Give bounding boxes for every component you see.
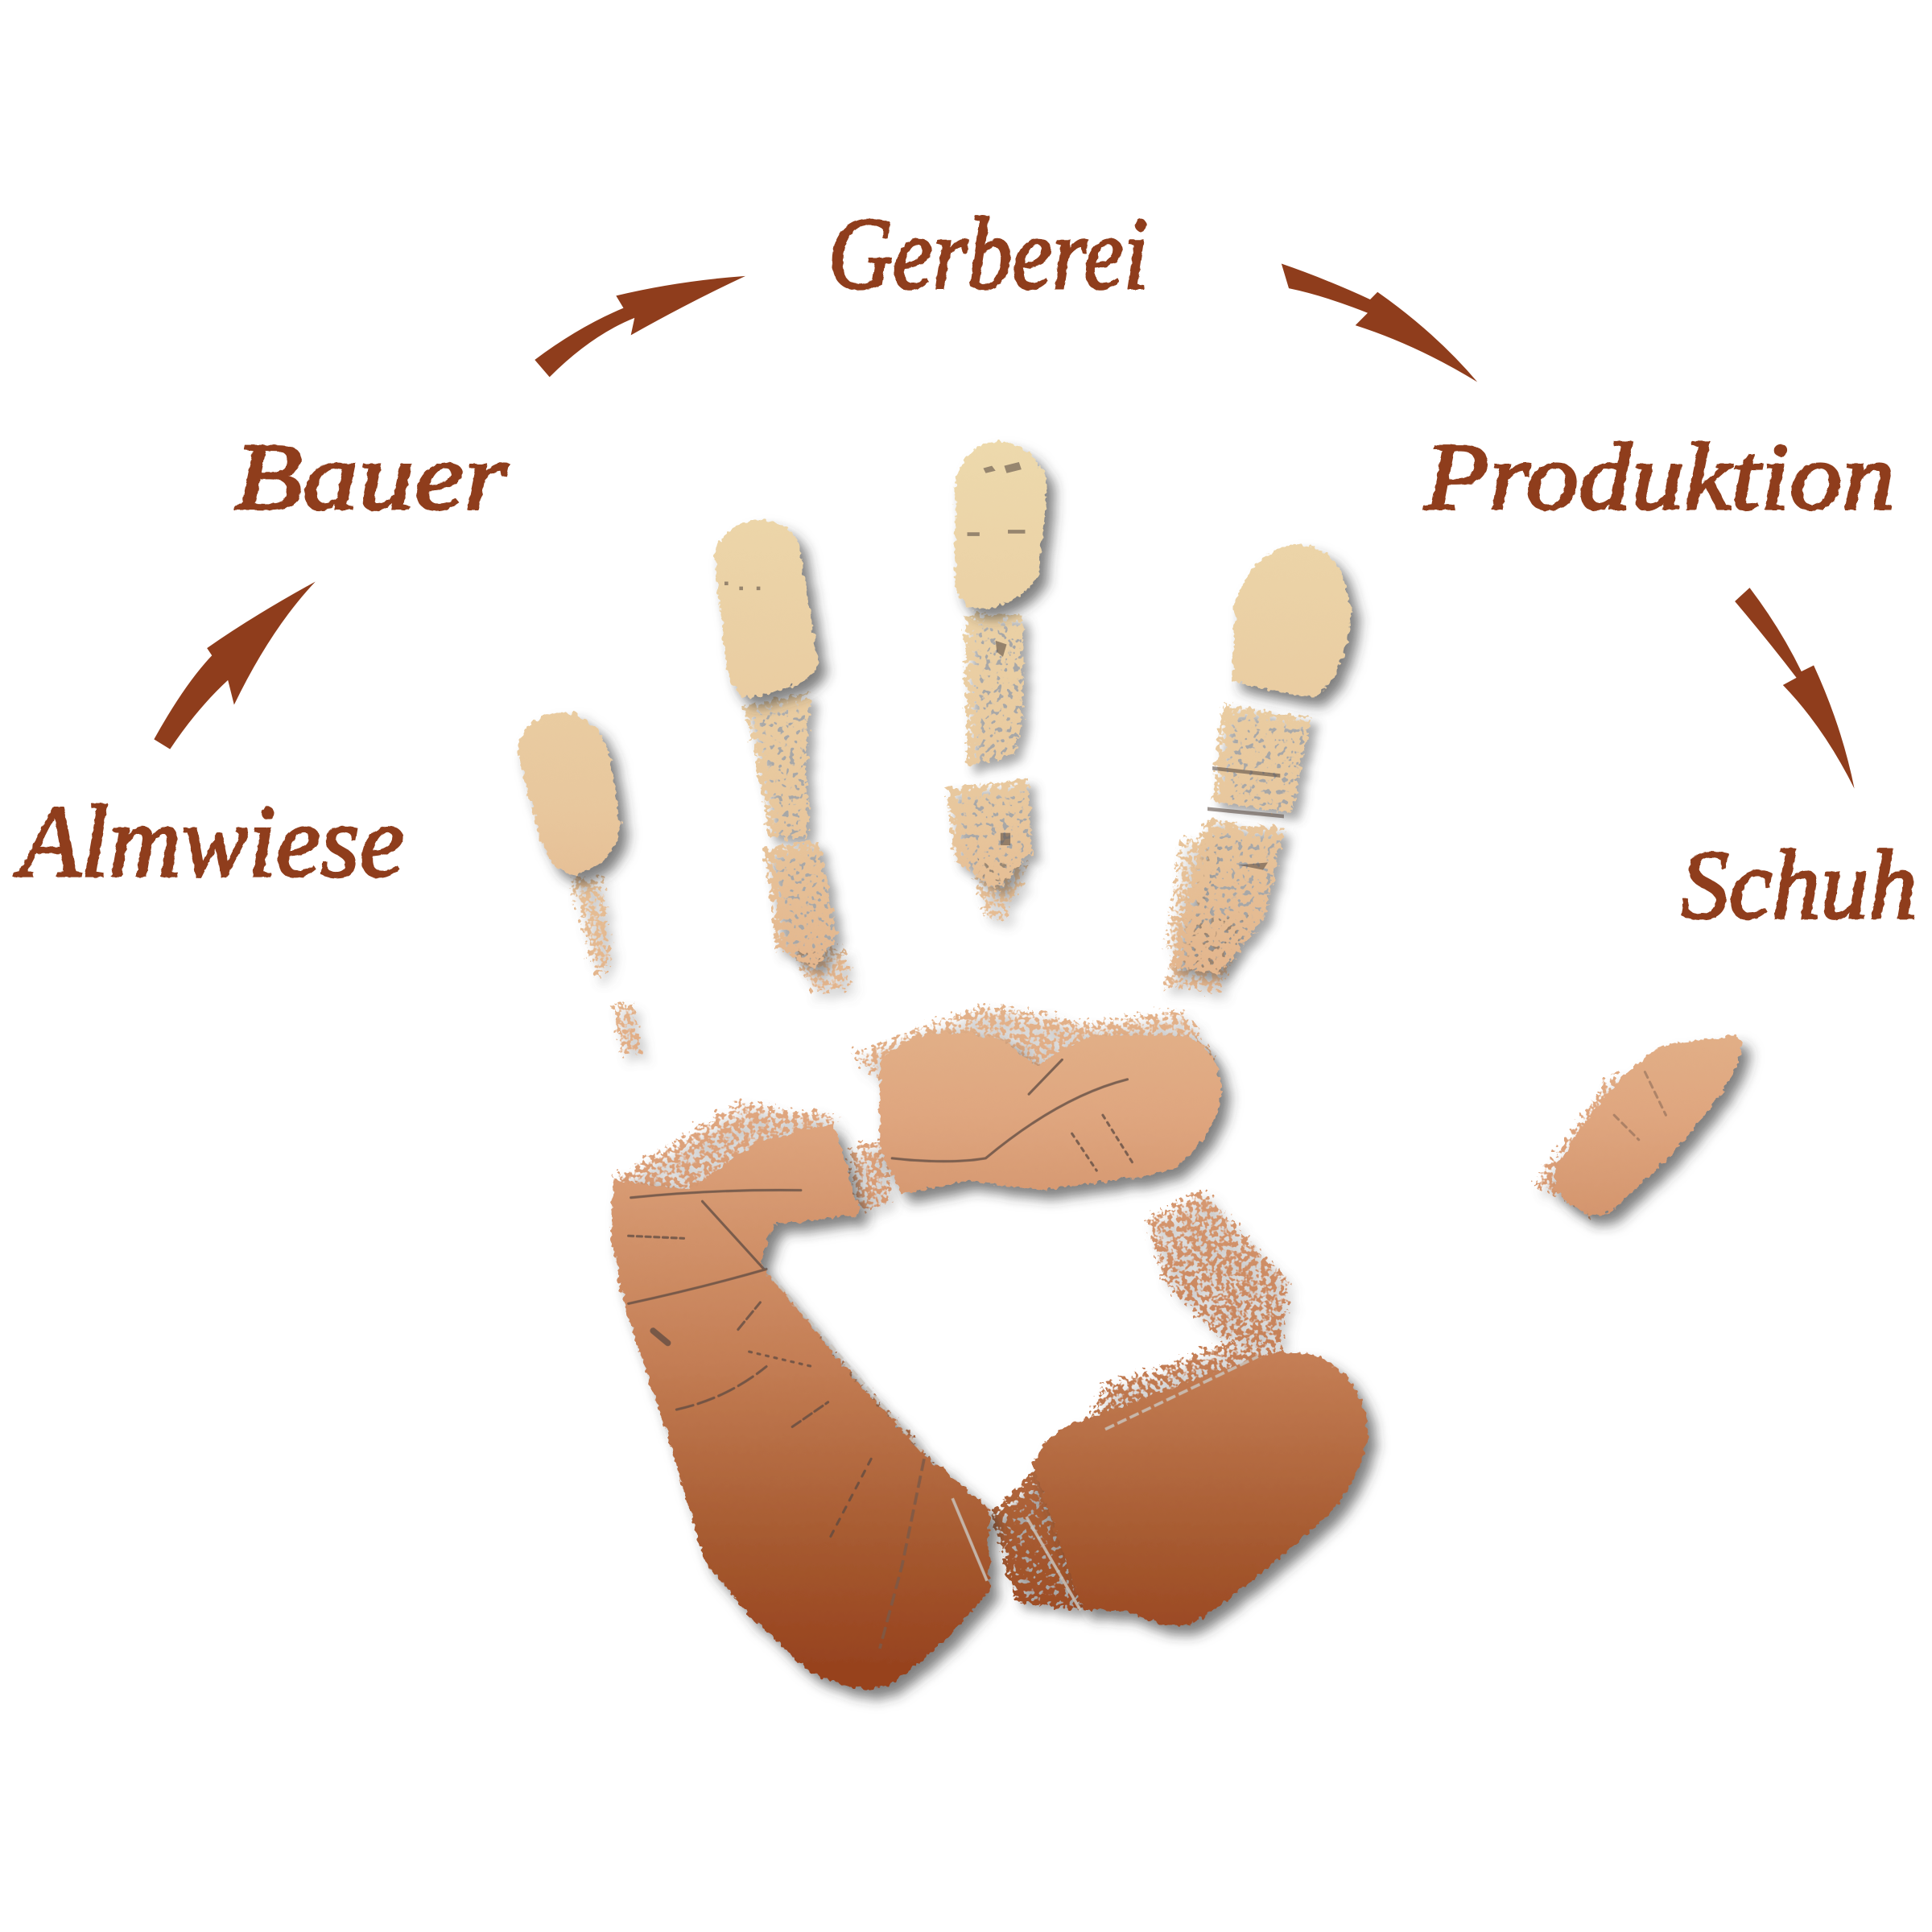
ring finger tip	[715, 520, 818, 697]
palm creases	[629, 1059, 1666, 1542]
label: Produktion: Produktion	[1423, 423, 1895, 530]
label: Gerberei: Gerberei	[828, 196, 1149, 311]
middle finger base	[964, 613, 1022, 766]
fingertips and palm solid areas	[518, 441, 1741, 1688]
porous finger segments	[744, 613, 1311, 1611]
label: Schuh: Schuh	[1681, 831, 1918, 939]
label: Bauer: Bauer	[234, 423, 508, 530]
left heel of hand	[611, 1124, 989, 1688]
pinky tip	[518, 712, 621, 875]
palm join	[992, 1466, 1084, 1611]
arrow: Gerberei to Produktion	[1282, 264, 1477, 382]
thumb print	[1555, 1035, 1741, 1217]
arrow: Bauer to Gerberei	[535, 276, 745, 377]
arrow: Almwiese to Bauer	[154, 581, 316, 749]
dark pores on fingertips	[724, 462, 1284, 870]
upper palm pad	[880, 1033, 1221, 1193]
thumb base pad	[1033, 1352, 1368, 1625]
hand print	[518, 441, 1741, 1688]
speckled fringes	[569, 838, 1651, 1472]
ring finger base	[744, 692, 811, 838]
arrow: Produktion to Schuh	[1735, 588, 1855, 789]
pale lines in lower palm	[773, 1278, 1258, 1649]
middle finger tip	[955, 441, 1047, 609]
index finger base	[1212, 705, 1311, 813]
label: Almwiese: Almwiese	[14, 783, 404, 898]
index finger tip	[1232, 545, 1351, 697]
